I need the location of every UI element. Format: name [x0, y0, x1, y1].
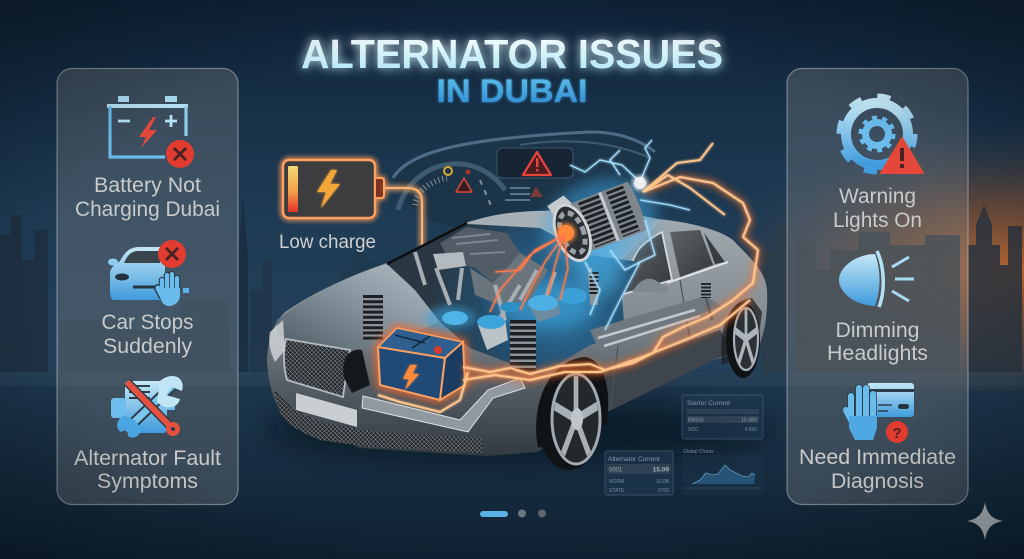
- icon: gear with warning triangle: [840, 97, 923, 173]
- label: dimming headlights: Headlights: [827, 342, 928, 365]
- data panel: alternator current: 15.09: [653, 466, 669, 474]
- battery glow: [378, 328, 465, 400]
- front wheel: [536, 357, 608, 470]
- icon: hand with card and question mark: [846, 383, 914, 443]
- intake manifold: [440, 227, 520, 283]
- low charge label: Low charge: [279, 232, 376, 253]
- licence plate: [296, 393, 357, 427]
- label: warning lights on: Warning: [839, 185, 916, 208]
- alternator blue halo: [531, 163, 669, 281]
- label: need immediate diagnosis: [799, 446, 956, 493]
- stop hand: [158, 274, 180, 306]
- chassis rail: [590, 296, 722, 352]
- orange charging lightning: [378, 143, 758, 412]
- gauge cluster: [398, 164, 505, 210]
- front wheel well: [343, 350, 370, 393]
- dashboard: [393, 132, 665, 228]
- label: warning lights on: Lights On: [833, 209, 922, 232]
- lower door shade: [600, 330, 735, 414]
- title line 1: ALTERNATOR ISSUES: [301, 31, 723, 77]
- pistons: [478, 318, 508, 350]
- steel bracket: [433, 252, 466, 270]
- suspension arm: [362, 378, 525, 432]
- left glass panel: [57, 68, 238, 504]
- pagination dots: [480, 510, 546, 518]
- blue glow patches: [495, 281, 595, 329]
- data panel: starter current: 15.5B0: [741, 418, 757, 424]
- dubai skyline silhouette: [0, 195, 1022, 372]
- windows: [620, 230, 728, 295]
- label: alternator fault symptoms: Alternator Fault: [74, 447, 221, 470]
- door panels: [610, 280, 690, 410]
- hood: [277, 264, 440, 350]
- rods: [415, 252, 592, 320]
- label: need immediate diagnosis: Diagnosis: [831, 470, 924, 493]
- right glass panel: [787, 68, 968, 504]
- icon: car with stop hand: [108, 240, 189, 306]
- engine block: [470, 253, 548, 305]
- silver cowl: [467, 211, 660, 262]
- bolt: [317, 170, 340, 208]
- title: [301, 31, 723, 109]
- data panel: alternator current: 0700: [658, 488, 669, 494]
- data panel: alternator current: STATE: [609, 488, 625, 494]
- data panel: starter current: 4.550: [744, 427, 757, 433]
- label: alternator fault symptoms: Symptoms: [97, 470, 198, 493]
- rear wheel: [721, 298, 762, 378]
- center warning display: [497, 148, 573, 178]
- icon: battery with red x: [107, 96, 194, 168]
- icon: alternator with crossed tools: [111, 376, 183, 438]
- blue lightning: [570, 140, 690, 330]
- label: car stops suddenly: [102, 311, 194, 358]
- icon: hand with card and question mark: ?: [892, 425, 902, 442]
- alternator: [544, 171, 650, 266]
- data panel: voltage line chart: Global Charts: [683, 449, 714, 455]
- alternator spark: [634, 177, 646, 189]
- label: car stops suddenly: Car Stops: [102, 311, 194, 334]
- data panel: alternator current: 0001: [609, 468, 623, 474]
- data panel: alternator current: 10.0B: [656, 479, 670, 485]
- data panel: alternator current: NORM: [609, 479, 624, 485]
- icon: dimming headlight: [839, 251, 914, 307]
- label: battery not charging: Charging Dubai: [75, 198, 220, 221]
- sparkle watermark: [967, 502, 1003, 540]
- data panel: starter current: SOC: [688, 427, 699, 433]
- car body: [267, 210, 767, 456]
- label: alternator fault symptoms: [74, 447, 221, 493]
- coil springs: [373, 272, 712, 372]
- data panel: voltage line chart: [682, 449, 763, 495]
- label: car stops suddenly: Suddenly: [103, 335, 192, 358]
- data panel: alternator current: Alternator Current: [608, 456, 660, 463]
- headlight: [269, 320, 285, 362]
- lower bumper grille: [273, 387, 482, 453]
- front grille: [284, 339, 350, 397]
- label: battery not charging: Battery Not: [94, 174, 201, 197]
- car battery: [378, 328, 465, 400]
- ground shadow: [270, 400, 770, 460]
- low charge battery gauge: [279, 160, 422, 253]
- alternator hub spark: [558, 225, 574, 241]
- label: warning lights on: [833, 185, 922, 232]
- red sparks from alternator: [490, 235, 568, 312]
- wire to engine: [384, 188, 422, 248]
- label: dimming headlights: Dimming: [836, 319, 920, 342]
- car illustration: [267, 140, 770, 470]
- cowl black line: [387, 223, 467, 264]
- data panel: starter current: Starter Current: [687, 400, 730, 407]
- label: battery not charging: [75, 174, 220, 221]
- hand: [846, 388, 877, 440]
- floor reflection band: [0, 372, 1024, 386]
- label: dimming headlights: [827, 319, 928, 365]
- title line 2: IN DUBAI: [436, 73, 588, 109]
- engine bay: [387, 223, 640, 375]
- data panel: starter current: BMS/S: [688, 418, 704, 424]
- data panel: starter current: [682, 395, 763, 439]
- battery outline: [283, 160, 384, 218]
- label: need immediate diagnosis: Need Immediate: [799, 446, 956, 469]
- data panel: alternator current: [605, 451, 673, 495]
- orange lightning halo: [463, 177, 758, 380]
